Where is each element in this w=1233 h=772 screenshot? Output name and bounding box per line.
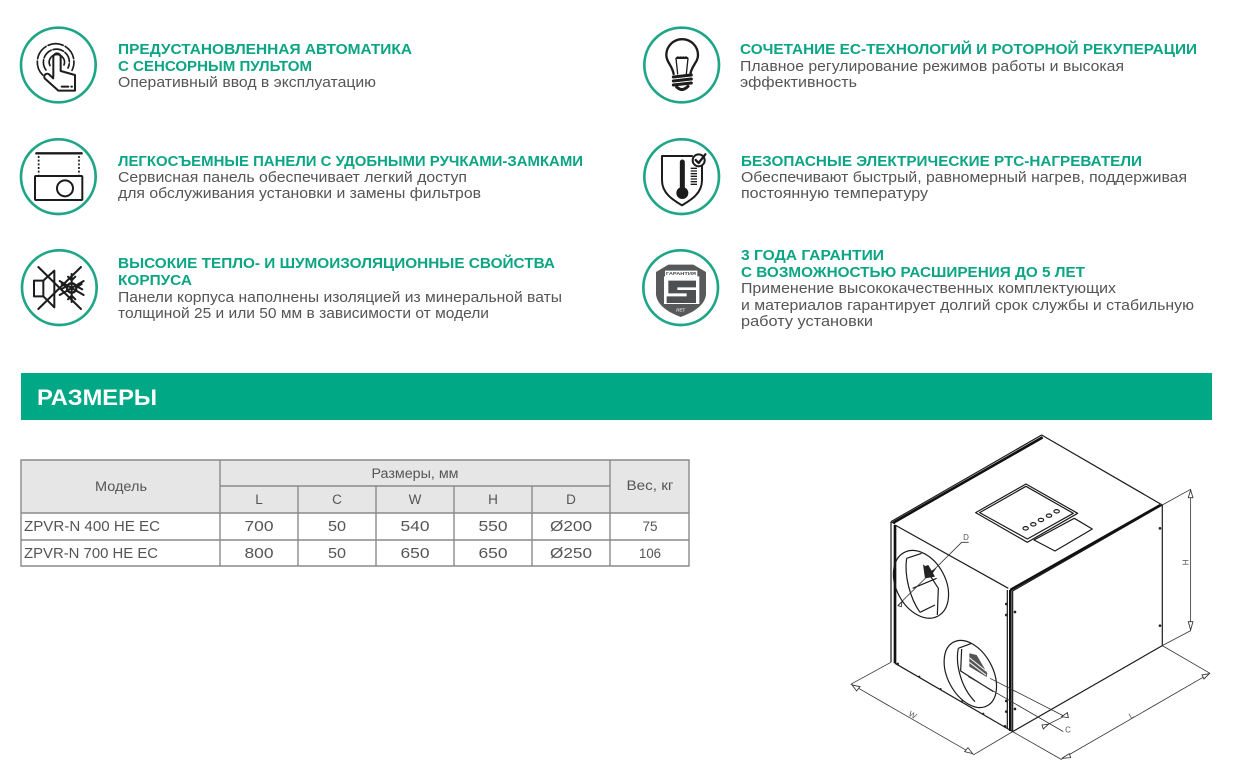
heading and text: ВЫСОКИЕ ТЕПЛО- И ШУМОИЗОЛЯЦИОННЫЕ СВОЙСТВА: [118, 254, 556, 272]
heading and text: ПРЕДУСТАНОВЛЕННАЯ АВТОМАТИКА: [118, 42, 413, 58]
dimensions table: Ø250: [550, 545, 592, 562]
icon: muted speaker and snowflake: [22, 250, 97, 325]
dimensions table: Вес, кг: [626, 478, 674, 493]
dimensions table: Размеры, мм: [372, 466, 458, 481]
dimensions table: W: [409, 492, 422, 507]
heading and text: для обслуживания установки и замены фильтров: [118, 186, 481, 202]
feature: EC technology: [644, 28, 1197, 102]
dimension lines: W: [907, 709, 918, 721]
heading and text: [740, 40, 1197, 91]
icon: thermometer shield: [644, 139, 719, 214]
dimensions table: ZPVR-N 700 HE EC: [24, 545, 158, 562]
dimensions table: [21, 460, 689, 566]
dimensions table: 550: [478, 518, 508, 535]
lower duct: [933, 632, 1007, 716]
heading and text: ЛЕГКОСЪЕМНЫЕ ПАНЕЛИ С УДОБНЫМИ РУЧКАМИ-ЗАМКАМИ: [118, 154, 583, 170]
heading and text: работу установки: [741, 314, 873, 330]
feature: preset automation: [21, 28, 413, 102]
dimensions table: 75: [642, 519, 658, 534]
feature: PTC heaters: [644, 139, 1187, 214]
heading and text: эффективность: [740, 75, 857, 91]
dimensions table: 50: [328, 518, 346, 535]
dimensions table: L: [255, 492, 263, 507]
heading and text: [741, 154, 1187, 202]
dimensions table: H: [488, 492, 498, 507]
icon: touch hand: [21, 28, 96, 102]
heading and text: [118, 154, 583, 202]
heading and text: Сервисная панель обеспечивает легкий доступ: [118, 170, 467, 186]
dimensions table: C: [332, 492, 342, 507]
dimensions table: 540: [400, 518, 430, 535]
section banner: sizes: [21, 373, 1212, 420]
heading and text: С ВОЗМОЖНОСТЬЮ РАСШИРЕНИЯ ДО 5 ЛЕТ: [741, 265, 1085, 281]
unit body: [891, 435, 1162, 732]
control panel: [976, 484, 1092, 551]
heading and text: КОРПУСА: [118, 273, 193, 289]
upper duct: [882, 541, 960, 628]
heading and text: толщиной 25 и или 50 мм в зависимости от модели: [118, 306, 489, 322]
dimensions table: 50: [328, 545, 346, 562]
dimension lines: D: [963, 533, 969, 542]
dimension lines: H: [1182, 559, 1191, 565]
icon: light bulb: [644, 28, 719, 102]
heading and text: Панели корпуса наполнены изоляцией из минеральной ваты: [118, 290, 562, 306]
dimension lines: C: [1065, 726, 1071, 735]
feature: removable panels: [21, 139, 583, 214]
heading and text: [118, 42, 413, 91]
heading and text: и материалов гарантирует долгий срок службы и стабильную: [741, 298, 1194, 314]
heading and text: [118, 254, 562, 322]
dimensions table: D: [566, 492, 576, 507]
heading and text: Обеспечивают быстрый, равномерный нагрев, поддерживая: [741, 170, 1187, 186]
feature: warranty: [643, 248, 1194, 330]
section banner: sizes: РАЗМЕРЫ: [37, 385, 157, 410]
heading and text: постоянную температуру: [741, 186, 929, 202]
dimension lines: [851, 489, 1210, 760]
heading and text: Применение высококачественных комплектующих: [741, 281, 1117, 297]
dimensions table: Ø200: [550, 518, 592, 535]
heading and text: 3 ГОДА ГАРАНТИИ: [741, 248, 884, 264]
icon: warranty shield: ГАРАНТИЯ: [666, 271, 696, 277]
icon: panel: [21, 139, 96, 214]
heading and text: Оперативный ввод в эксплуатацию: [118, 75, 376, 91]
heading and text: С СЕНСОРНЫМ ПУЛЬТОМ: [118, 59, 312, 75]
dimensions table: 700: [244, 518, 274, 535]
dimensions table: 106: [639, 546, 661, 561]
dimension lines: L: [1127, 710, 1136, 721]
feature: insulation: [22, 250, 562, 325]
icon: warranty shield: [643, 250, 718, 325]
dimensions table: 800: [244, 545, 274, 562]
heading and text: СОЧЕТАНИЕ ЕС-ТЕХНОЛОГИЙ И РОТОРНОЙ РЕКУПЕРАЦИИ: [740, 40, 1197, 58]
dimensions table: Модель: [95, 479, 147, 494]
icon: warranty shield: ЛЕТ: [676, 308, 685, 313]
heading and text: [741, 248, 1194, 330]
dimensions table: ZPVR-N 400 HE EC: [24, 518, 160, 535]
technical drawing of unit: [851, 435, 1210, 760]
heading and text: БЕЗОПАСНЫЕ ЭЛЕКТРИЧЕСКИЕ РТС-НАГРЕВАТЕЛИ: [741, 154, 1142, 170]
dimensions table: 650: [478, 545, 508, 562]
dimensions table: 650: [400, 545, 430, 562]
heading and text: Плавное регулирование режимов работы и высокая: [740, 59, 1124, 75]
